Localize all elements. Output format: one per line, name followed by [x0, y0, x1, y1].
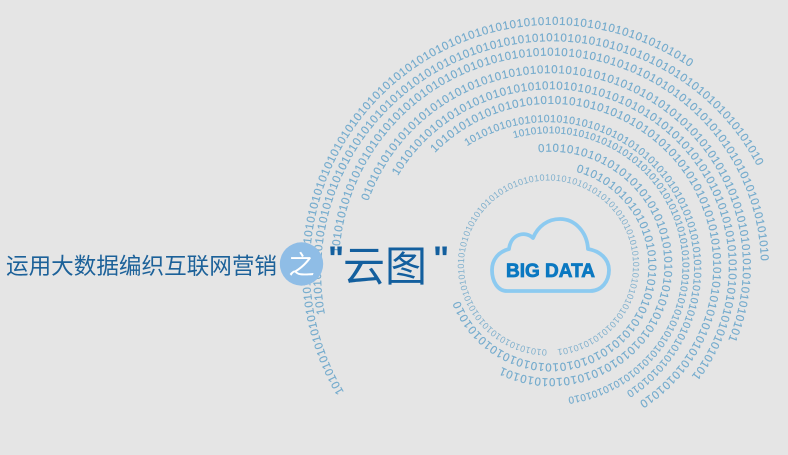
heading: cloud map title: ": [328, 240, 344, 278]
ring 11 inner: 01010101010101010101010101010101010101010101010101010101010101010101010101010101010101010101010101010101010101: [458, 174, 640, 356]
icon: cloud with BIG DATA: BIG DATA: [506, 261, 595, 282]
ring 7: 10101010101010101010101010101010101010101010101010101010101010101010101010101010101010101010101010101010101010: [464, 114, 702, 397]
ring 10: 01010101010101010101010101010101010101010101010101010101010101010101010101010101010101010101010101010101010101: [453, 164, 656, 372]
ring 1: 10101010101010101010101010101010101010101010101010101010101010101010101010101010101010101010101010101010101010: [302, 16, 693, 394]
badge: 之 circle: 之: [288, 250, 315, 280]
ring 8: 10101010101010101010101010101010101010101010101010101010101010101010101010101010101010101010101010101010101010: [513, 126, 690, 404]
icon: cloud with BIG DATA: [492, 219, 609, 291]
heading: left text: 运用大数据编织互联网营销: [6, 254, 277, 279]
ring 5: 10101010101010101010101010101010101010101010101010101010101010101010101010101010101010101010101010101010101010: [392, 81, 737, 380]
badge: 之 circle: [280, 242, 323, 286]
ring 6: 10101010101010101010101010101010101010101010101010101010101010101010101010101010101010101010101010101010101010: [431, 96, 722, 408]
heading: cloud map title: [328, 240, 449, 290]
ring 9: 01010101010101010101010101010101010101010101010101010101010101010101010101010101010101010101010101010101010101: [500, 144, 672, 386]
heading: cloud map title: 云图: [343, 243, 427, 290]
heading: cloud map title: ": [433, 240, 449, 278]
